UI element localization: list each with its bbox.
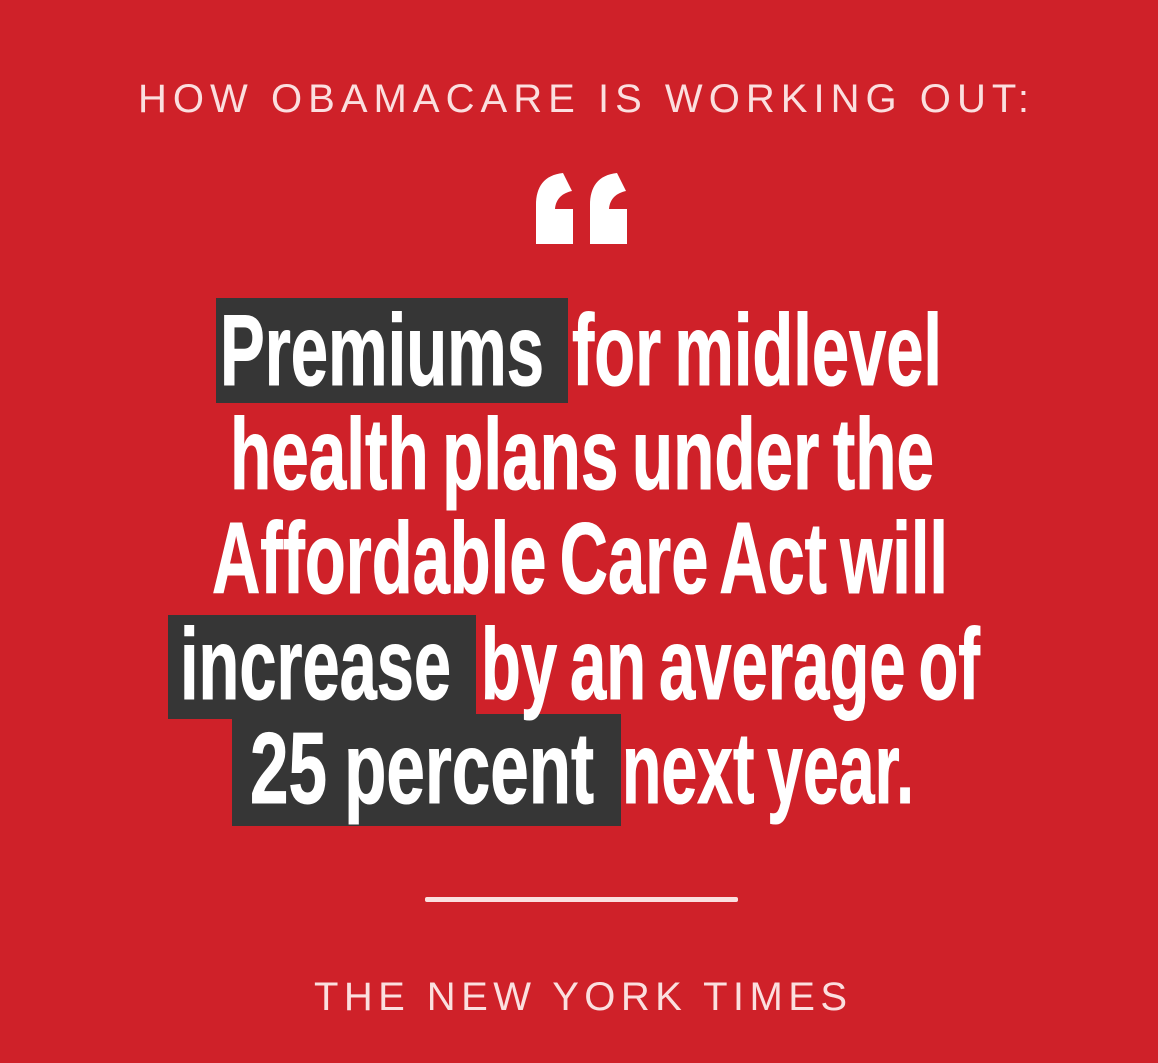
quote line 1: for midlevel: for midlevel — [572, 295, 942, 407]
source attribution: THE NEW YORK TIMES — [314, 975, 847, 1019]
icon: opening quotation mark — [536, 173, 627, 244]
quote line 5: next year.: next year. — [622, 713, 914, 825]
title: HOW OBAMACARE IS WORKING OUT: — [138, 77, 1029, 121]
divider rule — [425, 897, 738, 902]
quote text block — [168, 295, 980, 826]
highlight: 25 percent — [232, 714, 621, 826]
quote line 1: Premiums: Premiums — [220, 295, 544, 407]
highlight: increase — [168, 615, 476, 719]
quote line 4: increase: increase — [180, 609, 451, 721]
highlight: Premiums — [216, 298, 568, 403]
quote line 5: 25 percent: 25 percent — [250, 713, 594, 825]
